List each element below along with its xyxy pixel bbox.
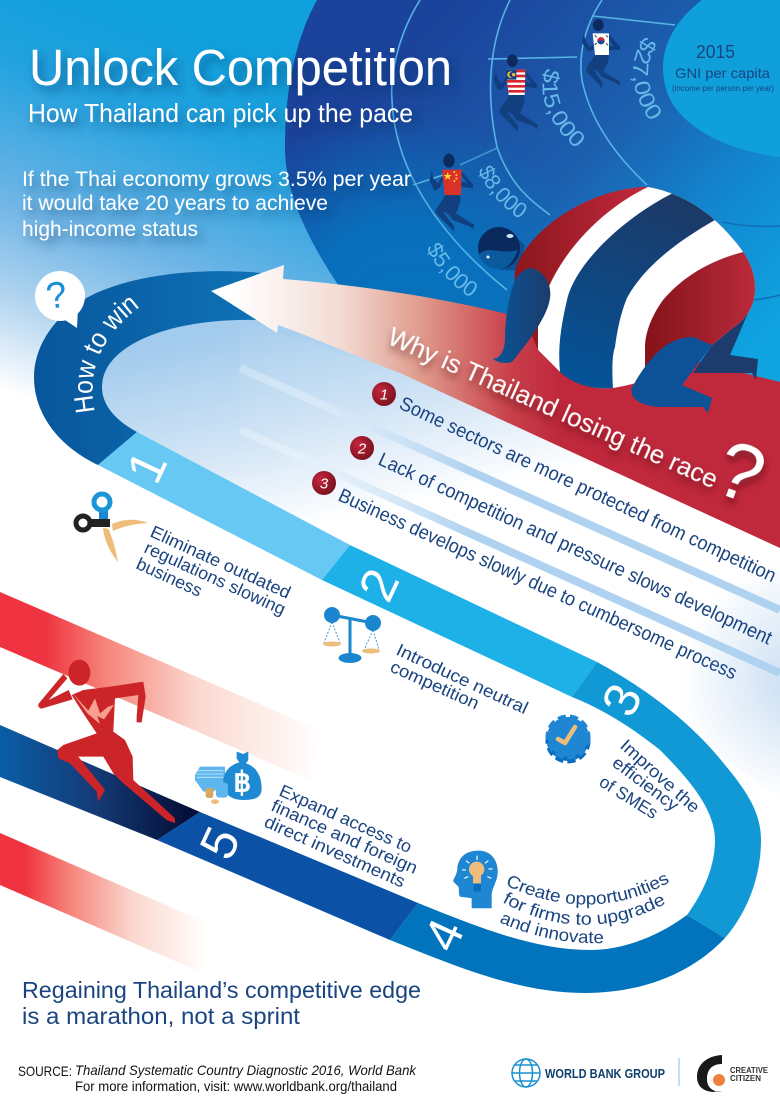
reason 3 badge: 3 [320,476,329,492]
source label: SOURCE: [18,1063,72,1079]
background gradient [0,0,780,560]
year: 2015 [696,42,735,62]
number 1: 1 [116,443,178,491]
closing line 2: is a marathon, not a sprint [22,1003,301,1029]
step 1 text: Eliminate outdated [147,521,294,603]
reason 2 badge: 2 [357,440,367,458]
step 3 text: of SMEs [596,771,662,823]
segment 1 [98,432,350,580]
icon: money bag [195,752,262,804]
large question mark: ? [704,422,776,521]
front arm [493,268,550,363]
segment 3 [572,662,761,938]
number 3: 3 [591,676,653,724]
step 5 text: finance and foreign [268,795,421,878]
upper red stripe [0,592,320,780]
step 3 text [596,735,704,823]
reasons list [312,382,779,684]
lower red stripe [0,833,205,974]
step 5 text: direct investments [261,811,409,892]
number 5: 5 [189,819,251,867]
runner: China [429,154,474,232]
closing line 1: Regaining Thailand’s competitive edge [22,977,421,1003]
flag body [514,187,755,388]
runner: Korea [582,19,620,88]
label 27,000: $27,000 [630,38,661,119]
step 5 text [261,780,421,892]
source title: Thailand Systematic Country Diagnostic 2016, World Bank [75,1062,417,1078]
GNI legend [672,42,774,93]
step 2 text: competition [387,656,482,713]
step 1 text: business [133,553,206,601]
logo divider [678,1058,680,1086]
reason 3 badge [312,471,336,495]
segment: sprint tail [0,725,200,840]
intro line 3: high-income status [22,218,198,241]
lane labels [428,38,661,296]
step 1 text: regulations slowing [141,537,289,619]
question bubble icon [35,271,85,328]
why heading [384,321,776,521]
race track circles [270,0,780,400]
source block [18,1062,417,1094]
inner panel: reasons background [60,295,780,800]
red stripes [0,592,320,974]
page lower background [0,400,780,1107]
question text: Why is Thailand losing the race [384,321,723,494]
closing message [22,977,421,1029]
question bubble icon: ? [43,273,69,317]
icon: gear check [548,717,588,761]
intro line 2: it would take 20 years to achieve [22,192,328,215]
step 3 text: Improve the [616,735,704,817]
step 4 text: and innovate [500,915,604,944]
more info: For more information, visit: www.worldbank.org/thailand [75,1078,397,1094]
Creative Citizen logo [697,1055,769,1092]
red arrow band [211,265,780,548]
step 4 text: Create opportunities [508,875,668,908]
emblem [697,1055,722,1092]
icon: money bag: ฿ [233,767,251,798]
subtitle: How Thailand can pick up the pace [28,98,413,128]
number 4: 4 [413,911,475,959]
lane lines [392,0,780,300]
label 15,000: $15,000 [542,69,584,146]
step 4 text [500,875,668,944]
globe [512,1059,540,1087]
number 2: 2 [348,561,410,609]
innermost lane [663,0,780,157]
red sprinter [38,660,175,823]
reason 3 text: Business develops slowly due to cumbersome process [335,485,740,684]
GNI note: (income per person per year) [672,83,774,93]
icon: balance scale [323,607,381,663]
step 4 text: for firms to upgrade [504,892,664,926]
segment 5 [157,812,418,940]
track [0,271,761,993]
runner: Thailand head [478,227,525,270]
reason 1 badge: 1 [380,386,388,404]
icon: idea head [453,851,498,908]
reason 1 badge [372,382,396,406]
step 3 text: efficiency [609,752,683,815]
World Bank Group logo [512,1059,665,1087]
intro line 1: If the Thai economy grows 3.5% per year [22,168,411,191]
segment 4 [390,903,725,993]
label 5,000: $5,000 [428,242,477,296]
how to win label: How to win [74,298,139,412]
wordmark line 1: CREATIVE [730,1066,769,1075]
icon: scissors [76,494,148,562]
label 8,000: $8,000 [478,166,526,218]
GNI label: GNI per capita [675,65,770,81]
front leg [631,337,712,413]
reason 2 badge [350,436,374,460]
wordmark: WORLD BANK GROUP [545,1067,665,1081]
runner: Malaysia [493,54,538,132]
segment 2 [322,545,597,697]
segment: how to win [34,271,262,465]
wordmark line 2: CITIZEN [730,1074,761,1083]
title: Unlock Competition [29,39,452,96]
step 5 text: Expand access to [276,780,415,857]
dark outer lane [270,0,780,400]
Thai runner [493,180,770,413]
back leg [693,313,758,380]
heading block [22,39,452,241]
step 2 text: Introduce neutral [393,639,531,718]
